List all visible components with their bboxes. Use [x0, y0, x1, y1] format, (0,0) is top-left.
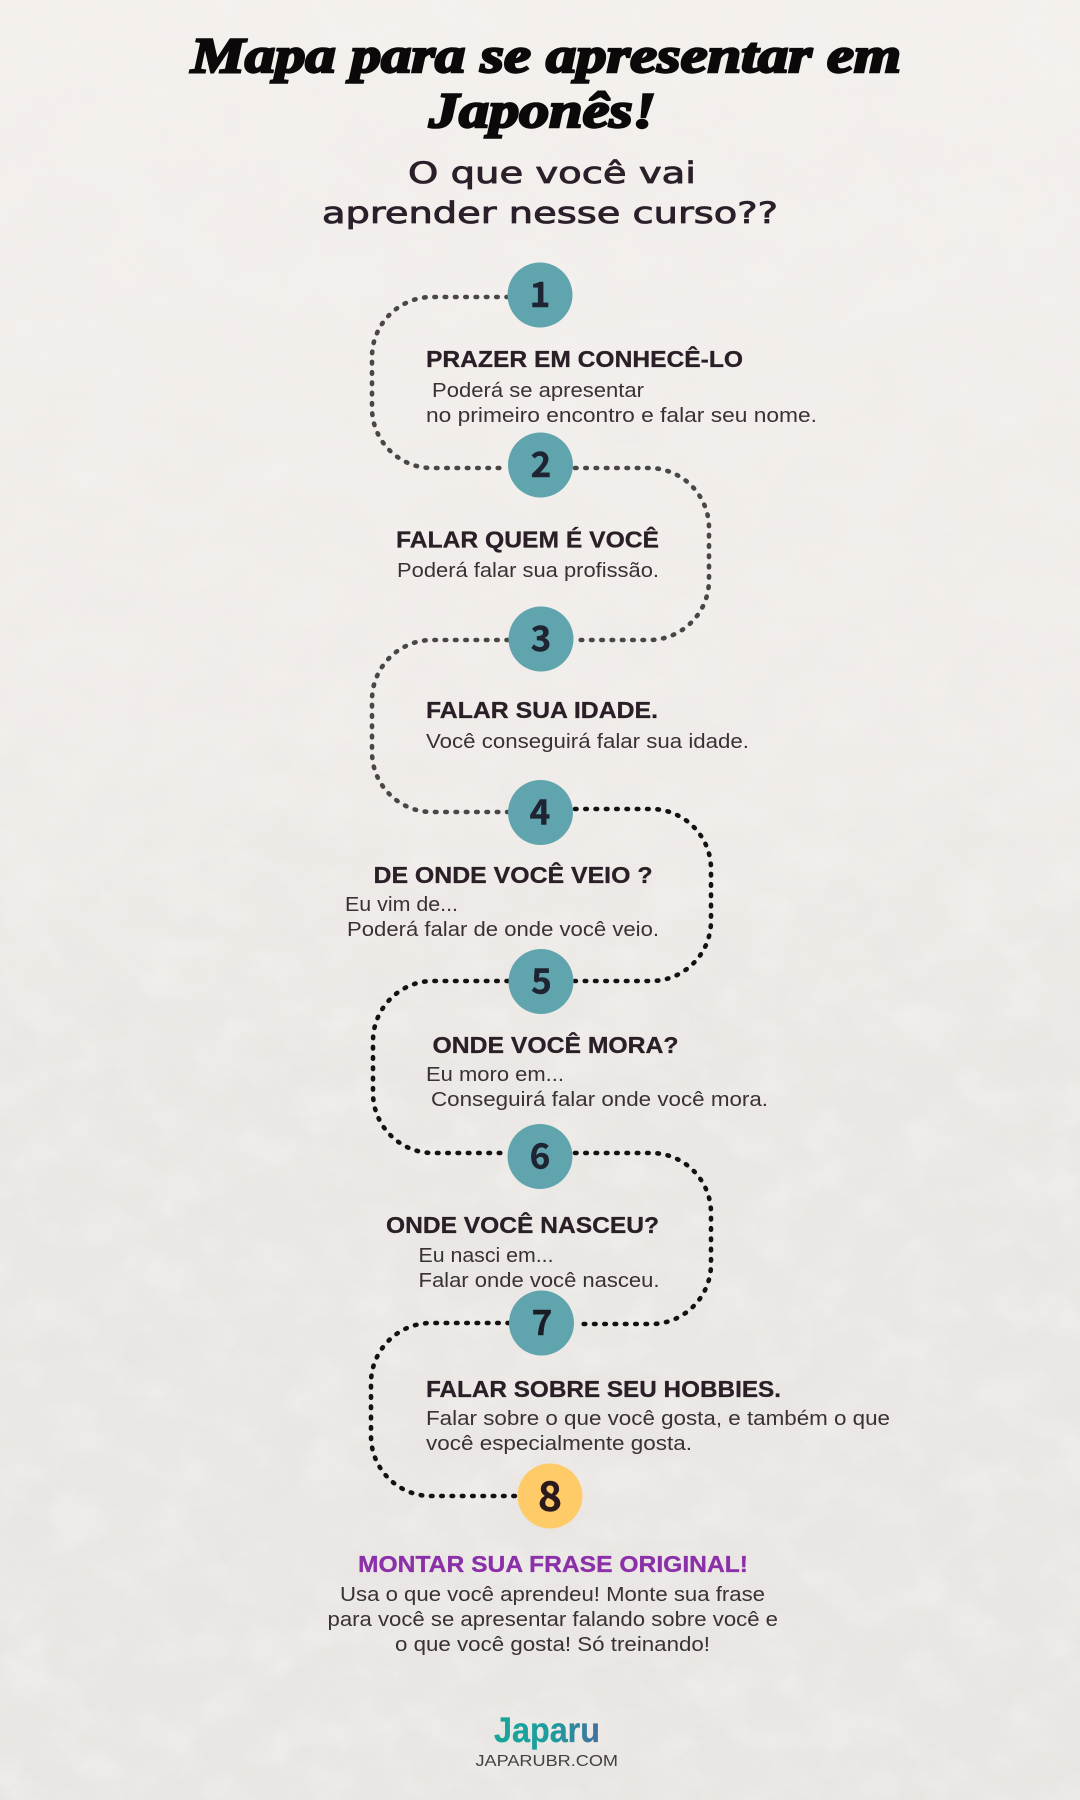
step 2 badge: 2: [531, 437, 551, 488]
step 3 heading: FALAR SUA IDADE.: [426, 697, 658, 723]
title: Japonês!: [428, 82, 656, 138]
step 1 description: Poderá se apresentar: [432, 380, 644, 402]
infographic canvas: [188, 38, 900, 1766]
step 6 badge: [508, 1124, 572, 1189]
step 7 badge: 7: [532, 1295, 552, 1346]
step 3 badge: 3: [531, 611, 551, 662]
subtitle: O que você vai: [408, 156, 696, 190]
dotted connector 2 to 3: [575, 468, 709, 640]
step 4 badge: [508, 780, 573, 845]
step 8 description: [328, 1584, 778, 1656]
step 1 description: [426, 380, 817, 427]
step 1 heading: PRAZER EM CONHECÊ-LO: [426, 345, 743, 372]
step 7 description: você especialmente gosta.: [426, 1433, 692, 1455]
step 7 heading: FALAR SOBRE SEU HOBBIES.: [426, 1376, 781, 1402]
step 5 heading: ONDE VOCÊ MORA?: [432, 1031, 678, 1058]
dotted connector 7 to 8: [371, 1323, 518, 1496]
step 1 badge: 1: [530, 267, 550, 318]
step 6 heading: ONDE VOCÊ NASCEU?: [386, 1211, 659, 1238]
step 6 description: Eu nasci em...: [418, 1245, 554, 1267]
dotted connector 1 to 2: [372, 297, 508, 468]
step 2 badge: [508, 432, 573, 498]
step 4 badge: 4: [530, 784, 550, 836]
subtitle: [322, 156, 778, 230]
step 7 description: [426, 1408, 890, 1455]
step 1 badge: [508, 262, 572, 328]
step 4 description: Poderá falar de onde você veio.: [347, 919, 659, 941]
step 1 description: no primeiro encontro e falar seu nome.: [426, 405, 817, 427]
step 8 description: para você se apresentar falando sobre você e: [328, 1609, 778, 1631]
dotted connector 4 to 5: [575, 809, 711, 981]
dotted connector 3 to 4: [372, 640, 508, 812]
step 6 description: Falar onde você nasceu.: [418, 1270, 660, 1292]
step 3 badge: [508, 606, 574, 672]
step 4 heading: DE ONDE VOCÊ VEIO ?: [374, 861, 652, 888]
logo: Japaru: [494, 1711, 600, 1750]
title: [190, 27, 901, 138]
step 8 description: o que você gosta! Só treinando!: [395, 1634, 710, 1656]
step 6 badge: 6: [530, 1128, 550, 1180]
step 5 badge: 5: [531, 954, 552, 1004]
dotted connector 5 to 6: [373, 981, 508, 1153]
step 5 description: Eu moro em...: [426, 1064, 564, 1086]
step 8 heading: MONTAR SUA FRASE ORIGINAL!: [358, 1551, 748, 1577]
step 7 badge: [509, 1290, 574, 1356]
step 3 description: Você conseguirá falar sua idade.: [426, 731, 749, 753]
step 7 description: Falar sobre o que você gosta, e também o que: [426, 1408, 890, 1430]
step 6 description: [418, 1245, 660, 1292]
step 2 heading: FALAR QUEM É VOCÊ: [396, 526, 659, 552]
step 5 description: Conseguirá falar onde você mora.: [431, 1089, 768, 1111]
subtitle: aprender nesse curso??: [322, 196, 778, 230]
step 5 description: [426, 1064, 768, 1111]
step 8 badge: 8: [538, 1463, 562, 1523]
step 4 description: Eu vim de...: [345, 894, 458, 916]
title: Mapa para se apresentar em: [190, 27, 901, 83]
step 4 description: [345, 894, 659, 941]
step 8 badge: [518, 1463, 582, 1528]
step 2 description: Poderá falar sua profissão.: [397, 560, 659, 582]
step 8 description: Usa o que você aprendeu! Monte sua frase: [340, 1584, 765, 1606]
website: JAPARUBR.COM: [476, 1753, 618, 1770]
dotted connector 6 to 7: [575, 1153, 711, 1324]
step 5 badge: [508, 949, 574, 1014]
